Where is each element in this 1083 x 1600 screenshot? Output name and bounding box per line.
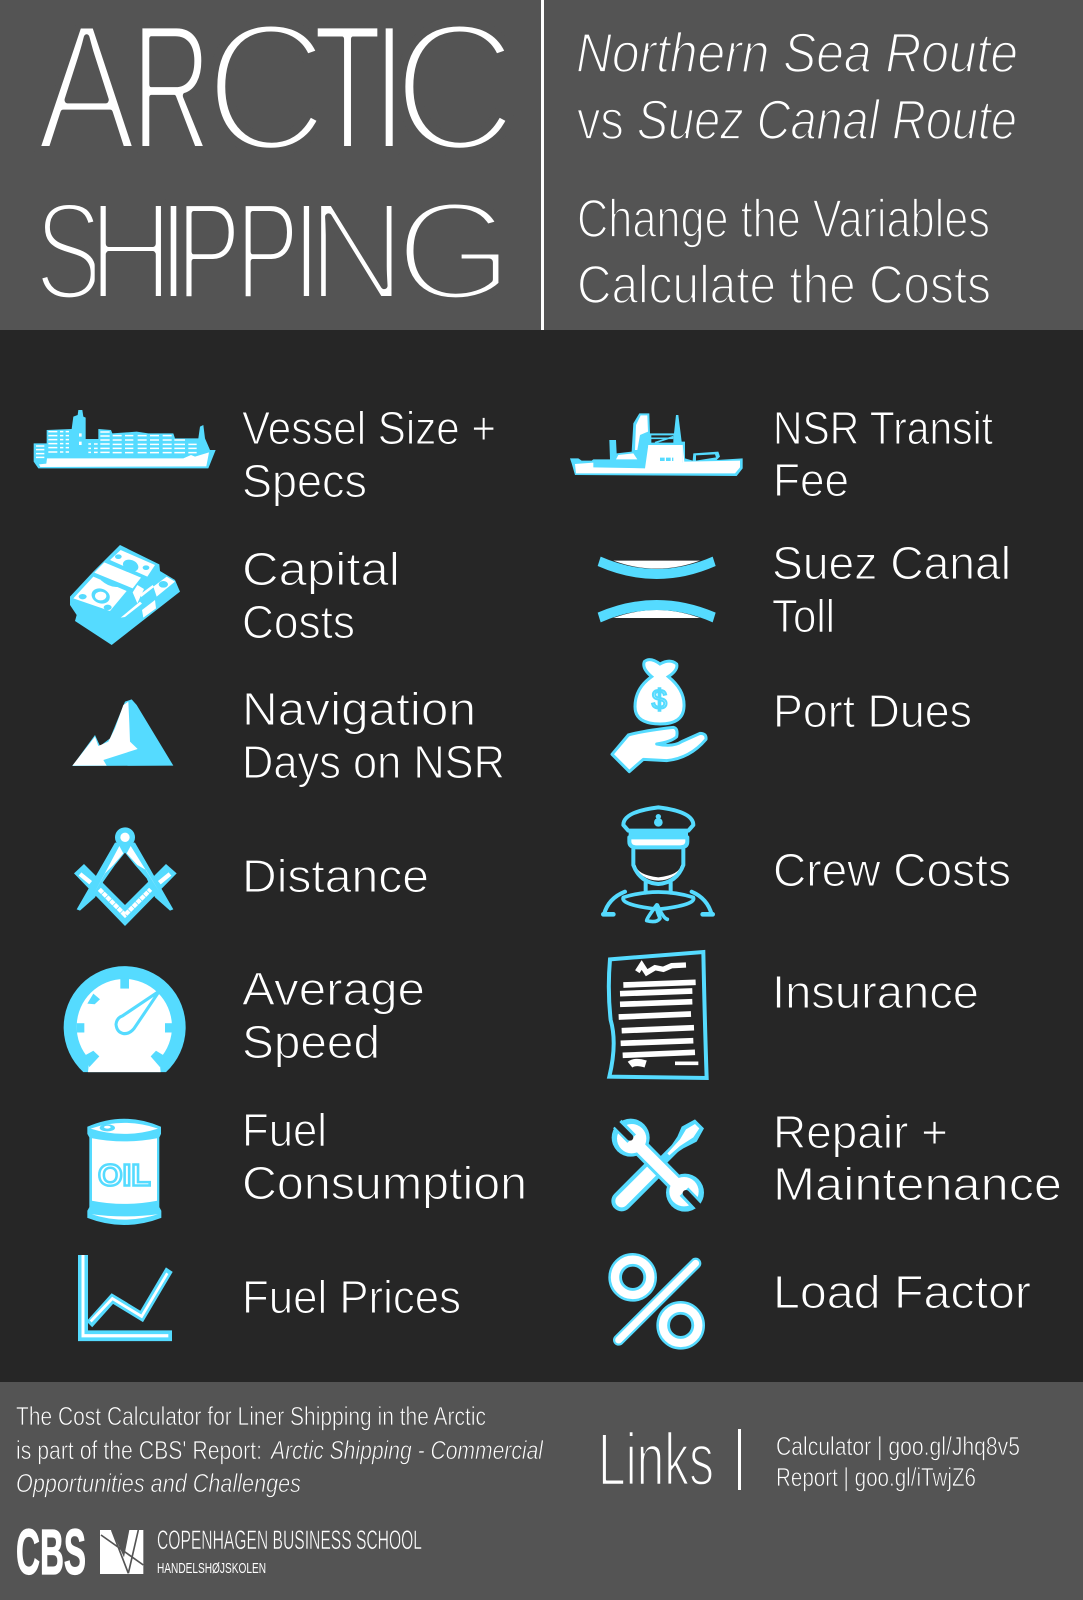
text: insurance: Insurance (772, 966, 979, 1018)
item: captain icon (603, 807, 713, 922)
logo: CBS: CBS (16, 1516, 86, 1588)
item: contract icon (609, 952, 707, 1078)
text: suez canal toll: Suez Canal (772, 537, 1011, 589)
text: suez canal toll (772, 537, 1011, 642)
logo: CBS: HANDELSHØJSKOLEN (157, 1560, 266, 1577)
text: capital costs (242, 543, 400, 648)
text: repair and maintenance (773, 1106, 1062, 1210)
text: fuel consumption (242, 1104, 527, 1209)
text: link urls: Calculator | goo.gl/Jhq8v5 (776, 1431, 1020, 1461)
subtitle: routes: vs Suez Canal Route (577, 88, 1017, 151)
heading: links: Links (598, 1418, 714, 1501)
logo mark (100, 1530, 143, 1574)
item: money bag and hand icon: $ (652, 684, 667, 715)
item: money bag and hand icon (612, 660, 706, 772)
text: navigation days (242, 683, 505, 788)
title: Shipping: S (35, 174, 102, 329)
text: link urls (776, 1431, 1020, 1492)
subtitle: variables (577, 189, 991, 315)
text: navigation days: Navigation (242, 683, 476, 735)
subtitle: routes: Northern Sea Route (576, 21, 1018, 84)
subtitle: routes (576, 21, 1018, 151)
title: Shipping: I (290, 172, 323, 330)
text: port dues: Port Dues (773, 685, 972, 737)
subtitle: variables: Calculate the Costs (577, 255, 991, 315)
title: Shipping: H (88, 172, 174, 330)
text: average speed (242, 963, 425, 1068)
title: Shipping: P (177, 174, 241, 329)
text: suez canal toll: Toll (772, 590, 835, 642)
text: report description: Opportunities and Challenges (16, 1468, 301, 1498)
text: average speed: Speed (242, 1016, 380, 1068)
text: capital costs: Capital (242, 543, 400, 595)
logo: CBS (16, 1516, 422, 1588)
text: average speed: Average (242, 963, 425, 1015)
text: vessel size (242, 402, 496, 507)
item: speedometer icon (64, 966, 186, 1072)
text: crew costs: Crew Costs (773, 844, 1011, 896)
subtitle: variables: Change the Variables (577, 189, 990, 249)
panel: header (0, 0, 1083, 330)
text: vessel size: Specs (242, 455, 367, 507)
text: link urls: Report | goo.gl/iTwjZ6 (776, 1462, 976, 1492)
text: repair and maintenance: Maintenance (773, 1158, 1062, 1210)
text: NSR transit fee: NSR Transit (773, 402, 993, 454)
item: tools icon (612, 1119, 704, 1212)
text: navigation days: Days on NSR (242, 736, 505, 788)
text: report description (16, 1401, 544, 1498)
title: Shipping: I (156, 172, 191, 330)
text: report description: is part of the CBS' Report: (16, 1435, 262, 1465)
title: Shipping: N (306, 172, 406, 330)
text: load factor: Load Factor (773, 1266, 1031, 1318)
panel: footer (0, 1382, 1083, 1600)
text: capital costs: Costs (242, 596, 355, 648)
logo: CBS: COPENHAGEN BUSINESS SCHOOL (157, 1525, 422, 1555)
item: chart icon (83, 1255, 172, 1336)
panel: variables (34, 402, 1062, 1343)
text: fuel consumption: Consumption (242, 1157, 527, 1209)
item: percent icon (615, 1260, 698, 1343)
item: iceberg icon (72, 699, 173, 766)
title: Shipping: G (395, 172, 514, 330)
text: report description: The Cost Calculator for Liner Shipping in the Arctic (16, 1401, 486, 1431)
text: vessel size: Vessel Size + (242, 402, 496, 454)
item: canal icon (598, 557, 716, 622)
item: icebreaker icon (570, 413, 743, 476)
item: oil can icon (87, 1119, 161, 1225)
text: NSR transit fee: Fee (773, 454, 849, 506)
text: repair and maintenance: Repair + (773, 1106, 948, 1158)
text: NSR transit fee (773, 402, 993, 506)
item: vessel size icon (34, 410, 216, 468)
text: distance: Distance (242, 850, 429, 902)
text: report description: Arctic Shipping - Commercial (269, 1435, 544, 1465)
text: fuel prices: Fuel Prices (242, 1271, 461, 1323)
item: capital costs icon (70, 545, 180, 645)
item: oil can icon: OIL (98, 1158, 151, 1193)
item: compass icon (74, 827, 177, 926)
text: fuel consumption: Fuel (242, 1104, 327, 1156)
title: Shipping: P (236, 174, 299, 329)
